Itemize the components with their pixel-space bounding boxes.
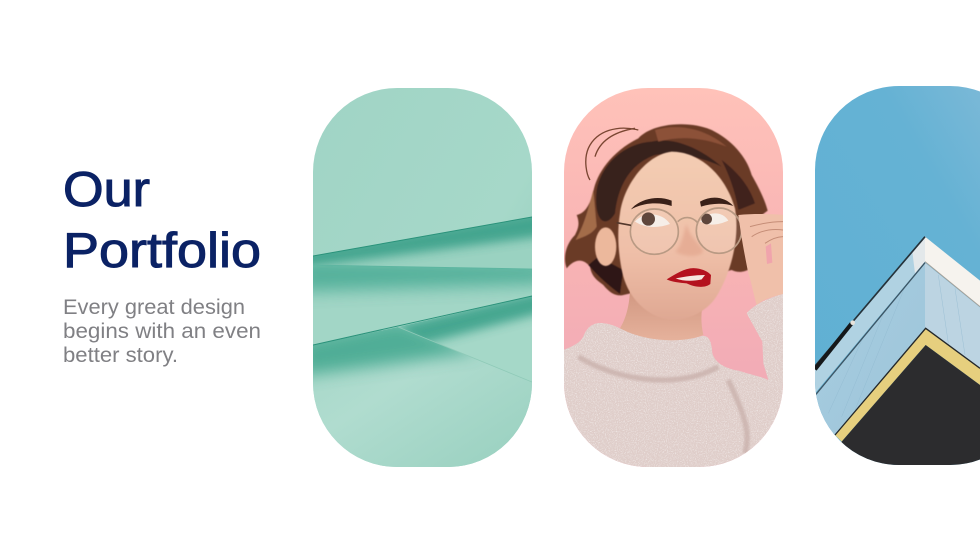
fascia shade [912, 237, 925, 273]
subtitle text: Every great design [63, 296, 245, 319]
title: Our [63, 163, 150, 217]
lower sheet [313, 327, 532, 467]
eyebrows [631, 198, 733, 209]
upper fold band [313, 218, 532, 268]
sweater collar shading [578, 357, 747, 453]
face [618, 152, 736, 320]
subtitle text: better story. [63, 344, 178, 367]
gap between fingers [766, 243, 772, 264]
nose shadow [676, 226, 702, 256]
lips [667, 268, 711, 287]
yellow trim [835, 328, 980, 442]
title [63, 163, 261, 278]
wall ribs [828, 275, 965, 417]
hand [738, 214, 785, 305]
gutter fixture [815, 320, 855, 369]
hair [565, 124, 768, 295]
left fascia [815, 252, 924, 392]
panel: building corner image [805, 86, 980, 470]
right wall [925, 263, 980, 368]
middle fold band [313, 265, 532, 302]
sweater [563, 293, 785, 470]
neck [620, 287, 703, 341]
dark soffit [838, 345, 980, 470]
white fascia right [925, 237, 980, 307]
subtitle text [63, 296, 261, 367]
left wall [816, 264, 925, 435]
glasses [617, 208, 742, 254]
ear [595, 227, 616, 266]
stray hair wisps [586, 128, 638, 180]
dark roof lines [815, 237, 980, 435]
fold crease lines [313, 217, 532, 382]
finger gaps [750, 222, 783, 243]
subtitle text: begins with an even [63, 320, 261, 343]
title: Portfolio [63, 224, 261, 278]
eyes [635, 212, 728, 227]
panel: folded mint paper image [313, 88, 532, 467]
panel: portrait image [563, 88, 785, 470]
right lower sheet [399, 296, 532, 382]
